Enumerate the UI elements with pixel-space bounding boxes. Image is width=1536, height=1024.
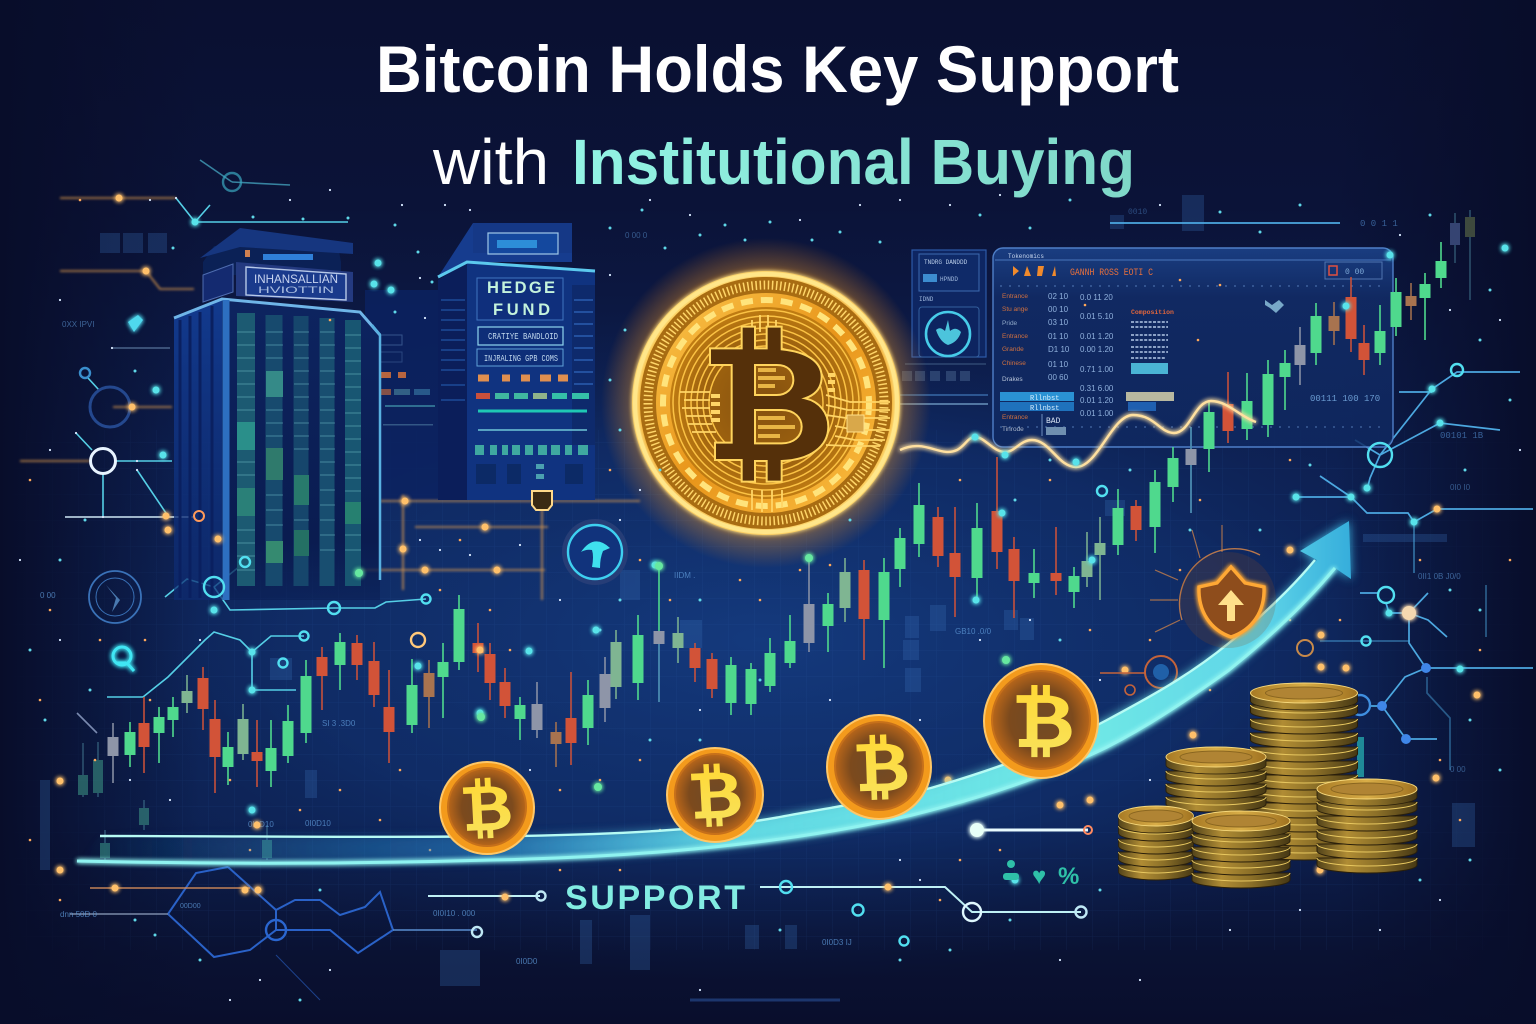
particles: cyan xyxy=(30,200,1510,1000)
title line 2 highlight: Institutional Buying xyxy=(572,126,1135,198)
tower sign xyxy=(236,262,353,302)
tower sign: INHANSALLIAN xyxy=(254,272,338,286)
dashboard labels column: Entrance xyxy=(1002,293,1028,300)
network nodes: rings xyxy=(80,173,1463,946)
dashboard value columns: 0.01 5.10 xyxy=(1080,312,1114,321)
dashboard header: 0 00 xyxy=(1345,268,1364,277)
bitcoin coin 2 xyxy=(667,748,763,842)
dashboard header: GANNH ROSS EOTI C xyxy=(1070,268,1153,279)
network lines: blue lower-left xyxy=(70,867,840,1000)
candlesticks: left to right xyxy=(83,210,1470,860)
small data labels: SI 3 .3D0 xyxy=(322,719,356,728)
hedge roof rim xyxy=(438,262,595,277)
small data labels: 0 00 0 xyxy=(625,231,648,240)
hedge info box 2 xyxy=(477,349,563,366)
dashboard value columns: 0.01 1.20 xyxy=(1080,396,1114,405)
small teal icons: % xyxy=(1058,863,1079,890)
cream node right xyxy=(1402,606,1416,620)
network lines: cyan links left xyxy=(65,160,426,733)
white dot connector xyxy=(970,823,984,837)
dashboard labels column: Pride xyxy=(1002,320,1018,327)
bitcoin coin 4 xyxy=(984,664,1098,778)
dashboard blue buttons: Rllnbst xyxy=(1030,405,1059,413)
shield arrow xyxy=(1218,590,1244,621)
trading dashboard panel: Tokenomics xyxy=(1008,253,1044,260)
network connector icon xyxy=(532,491,552,510)
dashboard labels column: Grande xyxy=(1002,346,1024,353)
tower side facade xyxy=(174,299,222,600)
target ring icon xyxy=(1100,664,1169,680)
small data labels: 00D00 xyxy=(180,903,201,910)
dashboard value columns: 0.01 1.00 xyxy=(1080,409,1114,418)
background dim tower xyxy=(365,290,450,500)
coin 4 symbol xyxy=(1017,685,1072,757)
middle stack xyxy=(1166,747,1266,812)
hedge fund sign: HEDGE xyxy=(487,279,555,297)
hedge fund sign xyxy=(477,278,563,320)
coin chip xyxy=(847,415,864,432)
dashboard composition block: Composition xyxy=(1131,309,1174,316)
dim candles xyxy=(83,210,1470,860)
bitcoin symbol xyxy=(710,327,828,482)
tower front facade xyxy=(222,299,380,600)
dim background blocks xyxy=(40,195,1475,986)
window columns xyxy=(237,313,361,586)
small data labels: 0I0D10 xyxy=(305,819,331,828)
particles: white xyxy=(20,190,1520,1000)
dashboard blue buttons xyxy=(1000,392,1074,413)
title line 2 lead: with xyxy=(432,126,549,198)
shield badge xyxy=(1150,525,1276,648)
coin glow xyxy=(601,238,931,568)
tower roof xyxy=(200,228,353,258)
tower left sign xyxy=(203,264,233,302)
panel icon xyxy=(926,312,970,356)
grey candles xyxy=(113,327,1300,783)
glowing nodes: amber xyxy=(60,198,1477,897)
dashboard value columns: 02 10 xyxy=(1048,292,1069,301)
side analytics panel: HPNDD xyxy=(940,276,958,283)
hedge roof block xyxy=(438,223,572,277)
coin dashed ring xyxy=(663,300,869,506)
arrow lower streak xyxy=(77,568,1335,863)
dashboard labels column: Entrance xyxy=(1002,333,1028,340)
support label: SUPPORT xyxy=(565,879,745,917)
side analytics panel: IDND xyxy=(919,296,934,303)
hedge info box 1: CRATIYE BANDLOID xyxy=(488,332,558,342)
dashboard icons and labels: 0 0 1 1 xyxy=(1360,219,1398,229)
small data labels: 0I0I10 . 000 xyxy=(433,909,476,918)
building: hedge fund xyxy=(438,223,595,500)
dashboard labels column: Drakes xyxy=(1002,376,1023,383)
grey-green candles xyxy=(187,517,1100,760)
horizontal light line between buildings xyxy=(380,455,467,457)
small teal icons xyxy=(1003,860,1079,890)
network lines: amber links xyxy=(20,198,640,600)
coin outer disc xyxy=(632,271,900,535)
hedge fund sign: FUND xyxy=(493,301,550,319)
back stack xyxy=(1250,683,1358,860)
coin 3 symbol xyxy=(856,734,908,800)
dashboard value columns: 0.00 1.20 xyxy=(1080,345,1114,354)
dashboard labels column: Chinese xyxy=(1002,360,1026,367)
center stack xyxy=(1192,811,1290,888)
coin lettering band xyxy=(648,285,884,521)
small data labels: 0 00 xyxy=(40,591,56,600)
arrow upper streak xyxy=(100,560,1315,837)
coin bright rim xyxy=(635,274,897,532)
small data labels: 0XX IPVI xyxy=(62,320,94,329)
dashboard labels column: Entrance xyxy=(1002,414,1028,421)
small data labels: 0I0D3 IJ xyxy=(822,938,852,947)
dashboard icons and labels xyxy=(1128,208,1484,441)
small data labels: 0II1 0B J0/0 xyxy=(1418,572,1461,581)
arrow ribbon xyxy=(77,521,1351,863)
hedge front facade xyxy=(467,262,595,500)
dashboard value columns: 0.0 11 20 xyxy=(1080,293,1113,302)
tower penthouse xyxy=(203,246,341,275)
small data labels: 0I0 I0 xyxy=(1450,483,1471,492)
dashboard lower mini boxes xyxy=(1042,414,1066,436)
dashboard icons and labels: 00101 1B xyxy=(1440,431,1484,441)
dashboard value columns: 00 60 xyxy=(1048,373,1069,382)
coin circuit traces xyxy=(680,315,890,512)
bitcoin coin 3 xyxy=(827,715,931,819)
bitcoin coin 1 xyxy=(440,762,534,854)
glowing nodes: green xyxy=(359,558,1006,798)
dashboard header xyxy=(1013,262,1382,279)
brown candles xyxy=(429,283,1411,767)
small data labels: IIDM . xyxy=(674,571,695,580)
dashboard value columns: 03 10 xyxy=(1048,318,1069,327)
coin 2 symbol xyxy=(690,762,742,828)
shield outline xyxy=(1199,567,1264,637)
red candles xyxy=(144,277,1364,793)
trading dashboard panel xyxy=(993,248,1393,447)
shield halo xyxy=(1180,549,1260,620)
dashboard lower mini boxes: BAD xyxy=(1046,417,1061,426)
coin side pads xyxy=(711,375,835,420)
dashboard value columns: D1 10 xyxy=(1048,345,1070,354)
dashboard labels column: Stu ange xyxy=(1002,306,1028,313)
dashboard blue buttons: Rllnbst xyxy=(1030,395,1059,403)
small data labels: GB10 .0/0 xyxy=(955,627,992,636)
coin 1 symbol xyxy=(462,777,512,839)
tower sign: HVIOTTIN xyxy=(258,285,334,295)
blue network nodes right xyxy=(1382,668,1426,739)
small teal icons: ♥ xyxy=(1032,863,1046,890)
dashboard icons and labels: 0010 xyxy=(1128,208,1147,217)
network nodes: warm rings xyxy=(90,448,1313,834)
side analytics panel xyxy=(900,250,988,404)
hedge side facade xyxy=(438,262,467,500)
coin inner face xyxy=(670,307,862,499)
network lines: support row xyxy=(428,830,1088,912)
dashboard labels column: Tinrode xyxy=(1002,426,1024,433)
dashboard value columns: 0.71 1.00 xyxy=(1080,365,1114,374)
small data labels: 0 00 xyxy=(1450,765,1466,774)
dashboard value columns: 01 10 xyxy=(1048,360,1069,369)
glowing nodes: cyan xyxy=(156,222,1505,880)
support arrow xyxy=(77,521,1351,863)
dashboard value columns xyxy=(1048,292,1114,418)
small data labels: 0I0D0 xyxy=(516,957,538,966)
building: institutional tower xyxy=(174,228,380,600)
small data labels: 0I0D10 xyxy=(248,820,274,829)
left stack xyxy=(1118,806,1194,880)
side analytics panel: TNDRG DANDDD xyxy=(924,259,968,266)
green candles xyxy=(130,242,1441,787)
coin stacks xyxy=(1118,683,1417,888)
network lines: cyan links right xyxy=(1110,223,1533,770)
particles: amber xyxy=(30,200,1510,900)
title line 1: Bitcoin Holds Key Support xyxy=(376,32,1179,106)
teal support post xyxy=(1357,737,1364,777)
dim arc ring left xyxy=(90,387,130,427)
main bitcoin coin xyxy=(601,238,931,568)
dashboard value columns: 00 10 xyxy=(1048,305,1069,314)
coin circuit rings xyxy=(673,310,859,496)
dashboard value columns: 0.01 1.20 xyxy=(1080,332,1114,341)
icon: cyan tag xyxy=(128,315,143,332)
small data labels: dnn 50D 0 xyxy=(60,910,97,919)
dashboard value columns: 0.31 6.00 xyxy=(1080,384,1114,393)
dashboard composition block xyxy=(1126,309,1174,411)
dashboard icons and labels: 00111 100 170 xyxy=(1310,394,1380,404)
icon: magnifier glow xyxy=(113,647,134,671)
status line curve xyxy=(900,401,1256,467)
symbol inner chips xyxy=(758,370,795,436)
small data labels xyxy=(40,231,1471,966)
icon: dim compass ring xyxy=(89,571,141,623)
right stack xyxy=(1317,779,1417,873)
hedge info box 1 xyxy=(478,327,563,345)
dashboard labels column xyxy=(1002,293,1028,433)
hedge info box 2: INJRALING GPB COMS xyxy=(484,354,558,364)
dashboard value columns: 01 10 xyxy=(1048,332,1069,341)
title xyxy=(376,32,1179,198)
up-arrow badge xyxy=(562,519,628,585)
hedge status rows xyxy=(475,378,589,484)
